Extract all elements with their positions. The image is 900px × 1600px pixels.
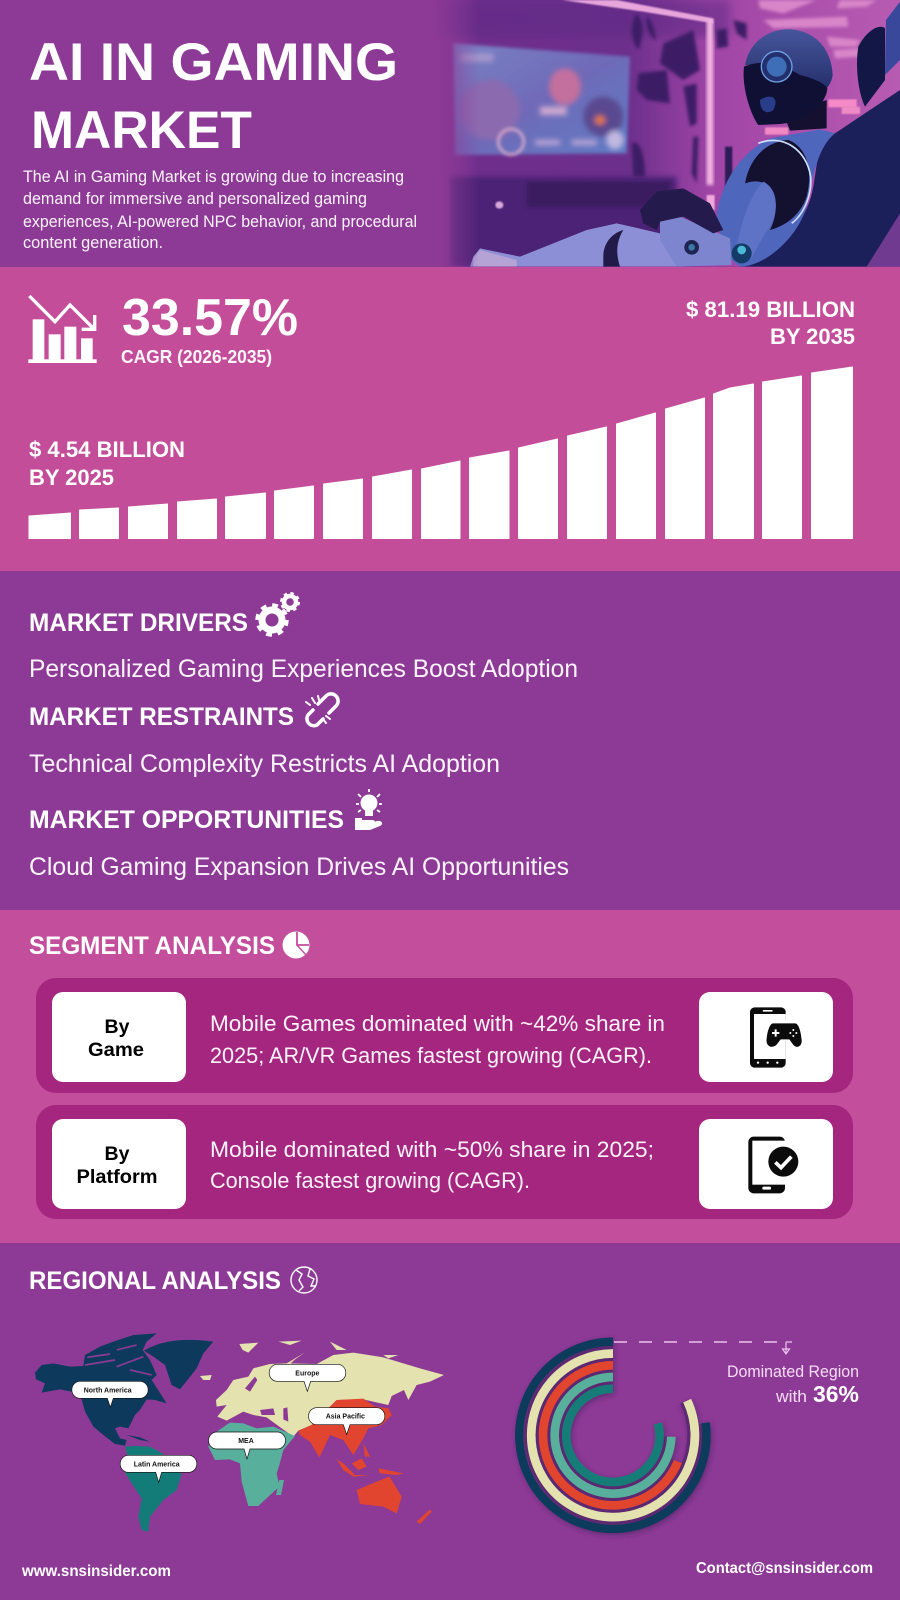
callout: Europe [269,1364,346,1391]
text: by game detail: Mobile Games dominated with ~42% share in [210,1011,665,1036]
text block: intro description [23,168,417,252]
callout: Europe: Europe [295,1371,319,1378]
region: Asia Pacific [298,1399,432,1524]
forearm [660,217,732,267]
card: phone with check icon [699,1119,833,1209]
panel: regional analysis [0,1243,900,1600]
radial bar chart: regional share [519,1342,707,1529]
torso [717,129,835,267]
title [29,33,398,160]
title: MARKET [31,101,252,160]
panel: market size [0,267,900,571]
label: 2035 value: BY 2035 [770,324,855,349]
helmet [745,29,833,93]
region: MEA [208,1423,295,1506]
footer: website: www.snsinsider.com [21,1563,171,1580]
text: by platform detail [210,1137,654,1193]
bar chart: market growth [29,367,852,538]
callout: Latin America [120,1455,197,1482]
card: by platform label: By [105,1143,130,1165]
region: North America [35,1333,213,1446]
text: by platform detail: Console fastest growing (CAGR). [210,1168,530,1193]
label: 2035 value: $ 81.19 BILLION [686,297,855,322]
text: drivers detail: Personalized Gaming Experiences Boost Adoption [29,655,578,683]
callout: North America: North America [84,1387,132,1394]
text: by game detail: 2025; AR/VR Games fastest growing (CAGR). [210,1043,652,1068]
icon: chart with trend arrow [28,296,97,363]
text: dominated region share: Dominated Region [727,1362,859,1381]
heading: regional analysis: REGIONAL ANALYSIS [29,1267,281,1295]
callout: North America [72,1381,148,1407]
callout: Asia Pacific: Asia Pacific [326,1414,365,1421]
card: by game label: By [105,1016,130,1038]
text block: intro description: content generation. [23,234,163,252]
region: Latin America [123,1446,182,1532]
fade: hero left edge [430,0,480,267]
card: by platform label [52,1119,186,1209]
card: by platform label: Platform [76,1166,158,1188]
callout: MEA [209,1432,285,1459]
card: phone with gamepad icon [699,992,833,1082]
icon: broken chain link [306,694,338,726]
region: Europe and North Asia [200,1341,444,1437]
thigh [470,223,683,267]
label: 2025 value [29,437,185,490]
icon: light bulb over hand [355,789,382,830]
callout: Asia Pacific [309,1408,385,1435]
panel: market dynamics [0,571,900,910]
panel: header background [0,0,900,267]
text: by platform detail: Mobile dominated with ~50% share in 2025; [210,1137,654,1162]
world map with region callouts [35,1333,444,1532]
callout: MEA: MEA [238,1438,254,1445]
text: by game detail [210,1011,665,1068]
heading: market restraints: MARKET RESTRAINTS [29,703,294,731]
icon: globe [291,1267,317,1293]
heading: segment analysis: SEGMENT ANALYSIS [29,932,275,960]
row: by game [36,978,853,1093]
text: opportunities detail: Cloud Gaming Expansion Drives AI Opportunities [29,853,569,881]
hand [640,188,723,233]
callout: Latin America: Latin America [134,1461,180,1468]
label: 2035 value [686,297,855,349]
heading: market opportunities: MARKET OPPORTUNITIES [29,806,344,834]
footer: contact: Contact@snsinsider.com [696,1560,873,1577]
text block: intro description: demand for immersive and personalized gaming [23,190,367,208]
label: 2025 value: BY 2025 [29,465,114,490]
text: dominated region share [727,1362,859,1407]
row: by platform [36,1105,853,1219]
text: dominated region share: with [775,1387,807,1406]
text block: intro description: The AI in Gaming Market is growing due to increasing [23,168,404,186]
neck [783,100,827,131]
text block: intro description: experiences, AI-powered NPC behavior, and procedural [23,213,417,231]
heading: market drivers: MARKET DRIVERS [29,609,248,637]
card: by game label: Game [88,1039,144,1061]
chair [740,90,900,267]
card: by game label [52,992,186,1082]
label: 2025 value: $ 4.54 BILLION [29,437,185,462]
panel: segment analysis [0,910,900,1243]
hero image: robot gamer in neon room [430,0,900,267]
icon: gears [258,594,298,634]
icon: pie chart [282,932,310,958]
title: AI IN GAMING [29,33,398,92]
callout: dominated region pointer [614,1342,792,1354]
text: dominated region share: 36% [813,1381,859,1407]
text: restraints detail: Technical Complexity Restricts AI Adoption [29,750,500,778]
stat: CAGR: 33.57% [122,289,298,347]
stat: CAGR: CAGR (2026-2035) [121,346,272,367]
